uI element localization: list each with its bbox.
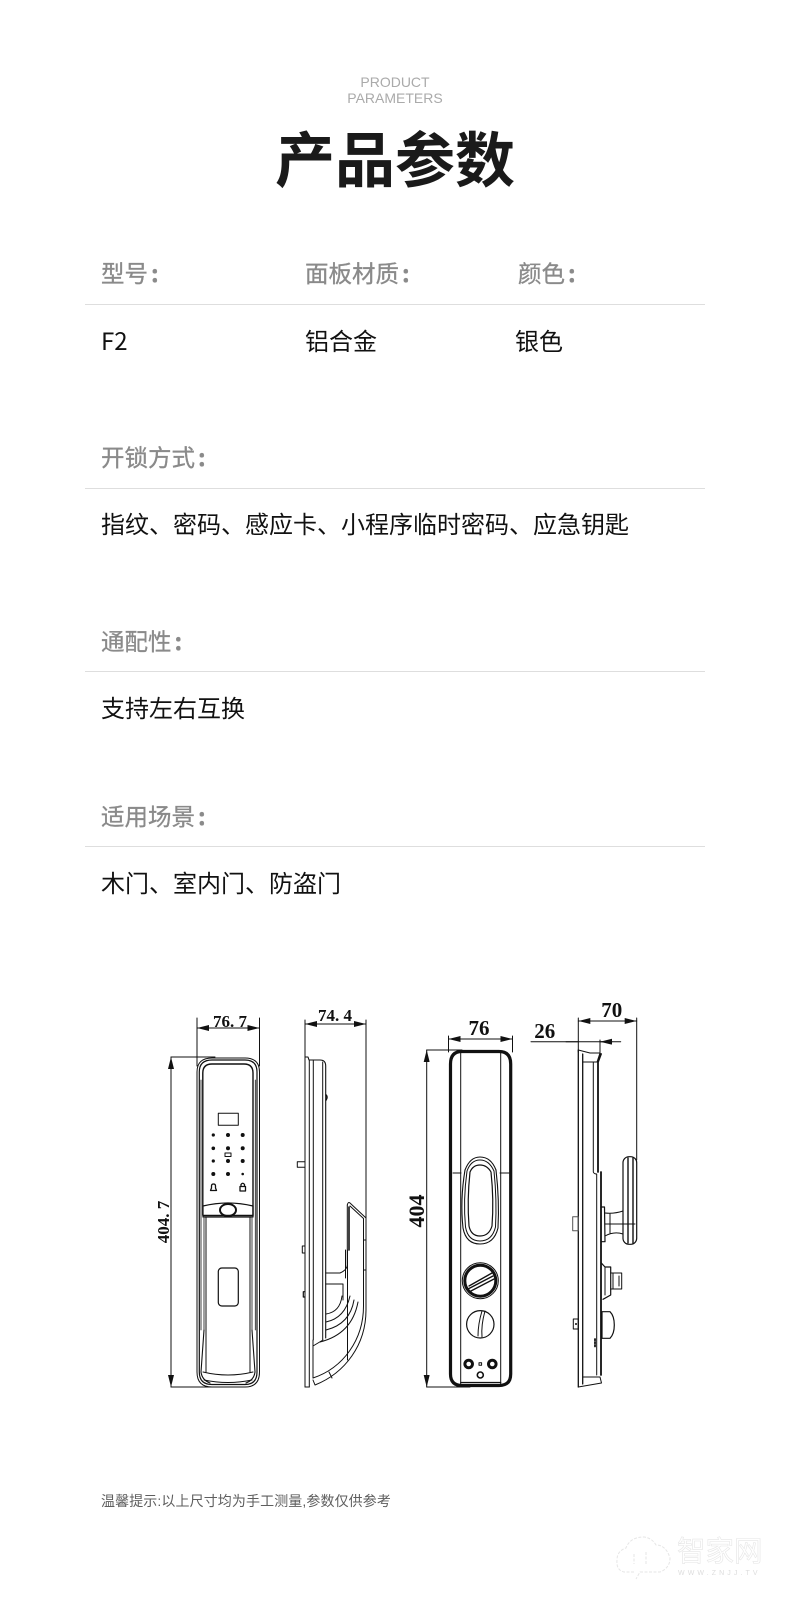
fingerprint handle band xyxy=(203,1203,253,1217)
title: 产品参数 xyxy=(275,128,515,195)
value: colour: 银色 xyxy=(515,322,563,357)
rotary thumb turn xyxy=(462,1263,498,1299)
handle xyxy=(313,1203,366,1385)
label: panel material: 面板材质: xyxy=(305,255,410,289)
dimension: height 404.7: 404. 7 xyxy=(154,1200,173,1243)
value: unlock methods: 指纹、密码、感应卡、小程序临时密码、应急钥匙 xyxy=(101,505,629,540)
value: compatibility: 支持左右互换 xyxy=(101,689,245,724)
icon: bell xyxy=(210,1184,216,1190)
thumb turn profile xyxy=(601,1263,622,1299)
lock body outline xyxy=(197,1058,260,1387)
drawing: rear side view xyxy=(531,998,637,1387)
dimension: width 76.7: 76. 7 xyxy=(213,1012,248,1031)
english subtitle: PARAMETERS xyxy=(347,90,443,106)
label: compatibility: 通配性: xyxy=(101,623,182,657)
label: colour: 颜色: xyxy=(518,255,576,289)
dimension: height 404.7 xyxy=(154,1057,235,1387)
dimension: depth 74.4: 74. 4 xyxy=(318,1006,352,1025)
side plate xyxy=(578,1050,602,1387)
pegs xyxy=(573,1217,578,1329)
english subtitle: PRODUCT xyxy=(360,74,430,90)
mounting plate xyxy=(305,1057,327,1387)
watermark url: WWW.ZNJJ.TV xyxy=(678,1570,761,1577)
label: unlock methods: 开锁方式: xyxy=(101,439,206,473)
handle grip xyxy=(601,1157,637,1244)
lever knob profile xyxy=(602,1312,614,1338)
value: panel material: 铝合金 xyxy=(305,322,377,357)
card sensor mark xyxy=(225,1153,231,1156)
dimension: width 76 xyxy=(448,1016,512,1052)
value: model: F2 xyxy=(101,322,128,357)
screws and sensor holes xyxy=(465,1360,496,1378)
dimension: offset 26: 26 xyxy=(534,1019,555,1043)
dimension: depth 70 xyxy=(578,998,637,1160)
dimension: depth 74.4 xyxy=(305,1006,366,1218)
rear pegs xyxy=(297,1162,305,1297)
thumb window xyxy=(218,1268,238,1306)
dimension: width 76.7 xyxy=(197,1012,260,1066)
icon: cloud xyxy=(616,1536,670,1579)
keypad xyxy=(211,1133,245,1176)
vent dots xyxy=(594,1339,596,1348)
watermark logo xyxy=(616,1529,763,1579)
dimension: height 404: 404 xyxy=(404,1194,429,1228)
drawing: side view with handle xyxy=(297,1006,366,1387)
rear plate outline xyxy=(450,1052,511,1386)
icon: padlock xyxy=(240,1183,246,1191)
dimension: offset 26 xyxy=(531,1019,621,1054)
value: applicable scenes: 木门、室内门、防盗门 xyxy=(101,864,341,899)
dimension: width 76: 76 xyxy=(468,1016,490,1040)
display window xyxy=(218,1113,238,1125)
label: applicable scenes: 适用场景: xyxy=(101,798,206,832)
footnote: 温馨提示:以上尺寸均为手工测量,参数仅供参考 xyxy=(101,1493,391,1509)
handle recess xyxy=(462,1157,498,1244)
label: model: 型号: xyxy=(101,255,159,289)
watermark name: 智家网 xyxy=(677,1529,763,1570)
lower grip panel xyxy=(201,1217,255,1383)
drawing: front view with keypad xyxy=(154,1012,260,1387)
drawing: rear view xyxy=(404,1016,512,1387)
dimension: height 404 xyxy=(404,1050,470,1387)
round lever knob xyxy=(467,1311,494,1338)
english subtitle xyxy=(347,74,443,106)
dimension: depth 70: 70 xyxy=(601,998,622,1022)
